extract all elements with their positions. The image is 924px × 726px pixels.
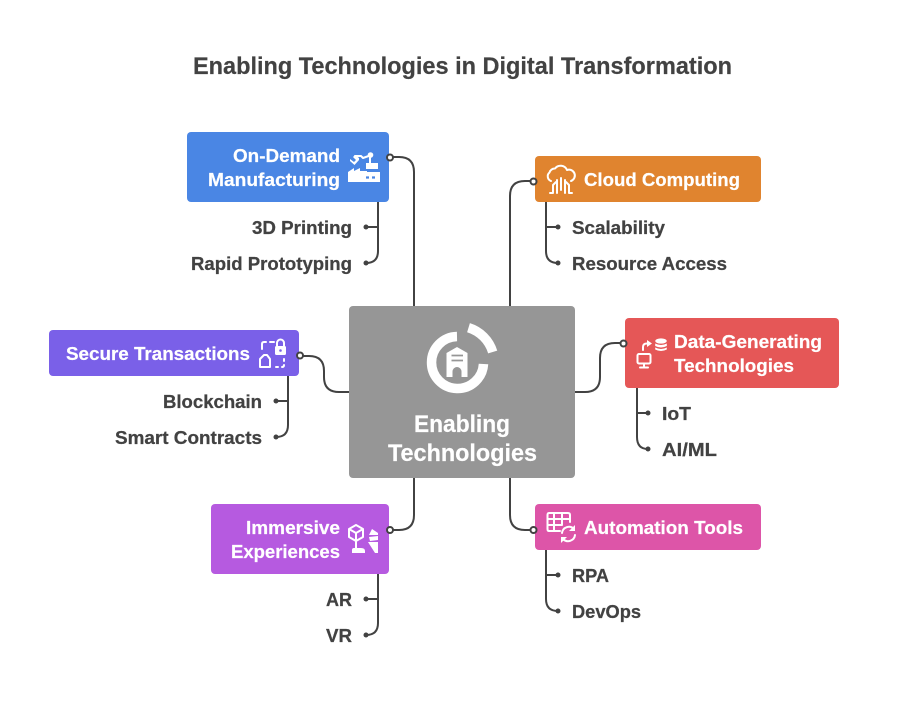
connector node <box>530 178 536 184</box>
connector node <box>297 352 303 358</box>
heading: Experiences <box>231 542 340 562</box>
label: Enabling Technologies: Technologies <box>388 440 537 467</box>
icon: monitor, database and arrow <box>638 338 667 368</box>
connector node <box>620 340 626 346</box>
sub-branch lines <box>366 202 378 263</box>
sub-branch lines <box>546 202 558 263</box>
heading: Immersive <box>246 518 340 538</box>
panel: On-Demand Manufacturing <box>187 132 393 274</box>
item: Blockchain: Blockchain <box>163 392 262 412</box>
item: VR: VR <box>326 626 352 646</box>
connector: center to Data-Generating Technologies <box>575 343 620 392</box>
connector node <box>387 527 393 533</box>
connector node <box>387 154 393 160</box>
connector: center to On-Demand Manufacturing <box>393 157 414 306</box>
item: IoT: IoT <box>662 404 691 424</box>
sub-branch lines <box>276 376 288 437</box>
panel: Data-Generating Technologies <box>620 318 839 460</box>
heading: Manufacturing <box>208 170 340 190</box>
panel: Cloud Computing <box>530 156 761 274</box>
panel: central node <box>349 306 575 478</box>
icon: robot arm and factory <box>348 152 380 182</box>
sub-branch lines <box>366 574 378 635</box>
sub-branch lines <box>546 550 558 611</box>
heading: Cloud Computing <box>584 170 740 190</box>
item: Smart Contracts: Smart Contracts <box>115 428 262 448</box>
item: 3D Printing: 3D Printing <box>252 218 352 238</box>
panel: Automation Tools <box>530 504 761 622</box>
connector: center to Secure Transactions <box>303 356 349 392</box>
panel: Secure Transactions <box>49 330 303 448</box>
icon: cloud with circuits <box>548 166 575 193</box>
heading: Data-Generating <box>674 332 822 352</box>
sub-branch lines <box>637 388 648 449</box>
label: Enabling Technologies: Enabling <box>414 411 510 438</box>
label: Enabling Technologies <box>388 411 537 467</box>
connector: center to Automation Tools <box>510 478 530 530</box>
icon: cube and headset shards <box>349 525 378 553</box>
item: Rapid Prototyping: Rapid Prototyping <box>191 254 352 274</box>
heading <box>674 332 822 376</box>
connector: center to Cloud Computing <box>510 181 530 306</box>
item: Resource Access: Resource Access <box>572 254 727 274</box>
heading <box>208 146 340 190</box>
title: Enabling Technologies in Digital Transformation <box>193 53 732 80</box>
icon: lock and document <box>260 340 286 367</box>
heading: Secure Transactions <box>66 344 250 364</box>
heading: Technologies <box>674 356 794 376</box>
heading: On-Demand <box>233 146 340 166</box>
item: DevOps: DevOps <box>572 602 641 622</box>
panel: Immersive Experiences <box>211 504 393 646</box>
heading: Automation Tools <box>584 518 743 538</box>
heading <box>231 518 340 562</box>
connector: center to Immersive Experiences <box>393 478 414 530</box>
icon: table with sync arrows <box>548 513 575 543</box>
item: RPA: RPA <box>572 566 609 586</box>
item: AR: AR <box>326 590 352 610</box>
item: AI/ML: AI/ML <box>662 440 717 460</box>
item: Scalability: Scalability <box>572 218 665 238</box>
icon: enabling technologies ring and building <box>432 328 493 388</box>
connector node <box>530 527 536 533</box>
